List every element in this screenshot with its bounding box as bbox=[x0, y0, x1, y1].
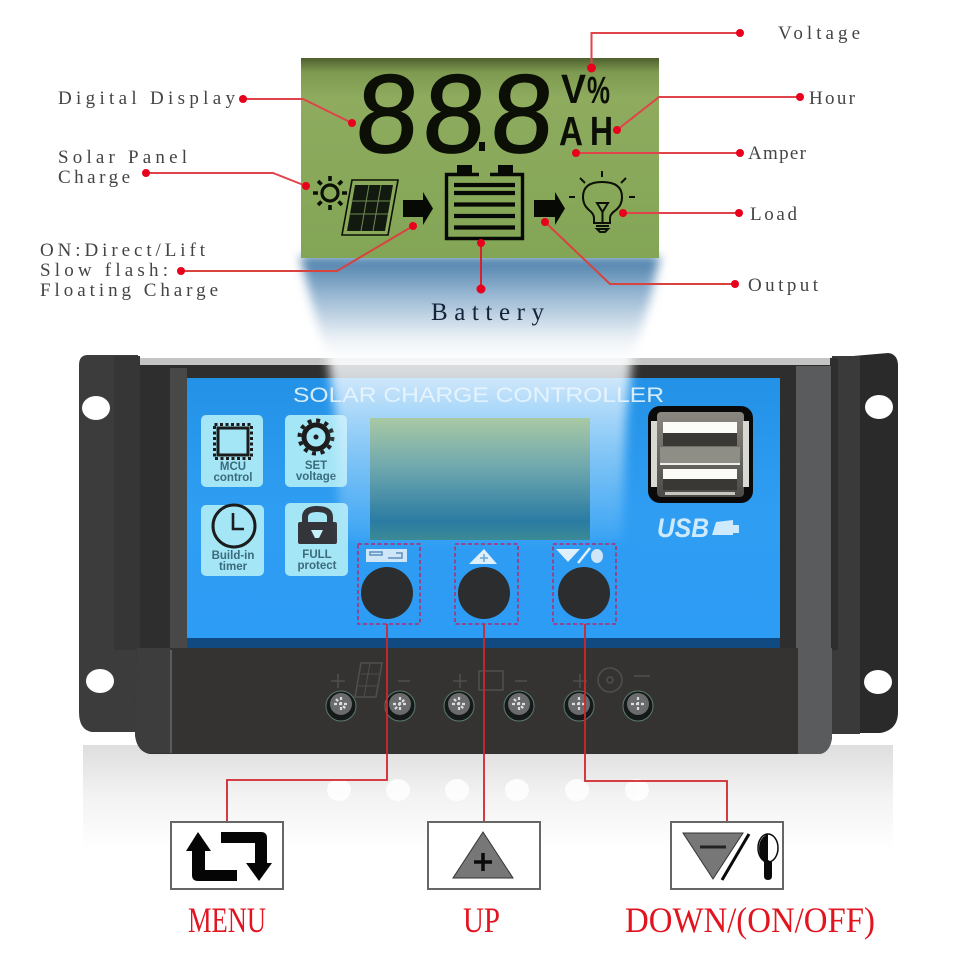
leader lines to buttons bbox=[227, 624, 727, 822]
unit labels: A bbox=[559, 108, 583, 154]
callout line: solar panel charge bbox=[142, 169, 310, 190]
mounting holes bbox=[82, 395, 893, 694]
feature tile: FULL protect bbox=[285, 503, 348, 576]
callout line: amper bbox=[572, 149, 744, 157]
USB label: USB bbox=[657, 513, 709, 543]
button label: DOWN/(ON/OFF): DOWN/(ON/OFF) bbox=[625, 900, 875, 940]
up key bbox=[428, 822, 540, 889]
label: Solar Panel Charge: Solar Panel bbox=[58, 147, 187, 168]
icon: light bulb bbox=[569, 171, 635, 232]
label: Solar Panel Charge bbox=[58, 147, 187, 188]
label: charge mode: Floating Charge bbox=[40, 280, 218, 301]
label: charge mode: ON:Direct/Lift bbox=[40, 240, 206, 261]
label: Solar Panel Charge: Charge bbox=[58, 167, 130, 188]
icon: sun bbox=[313, 176, 347, 210]
feature tile: MCU control: MCU bbox=[220, 461, 246, 473]
unit labels: H bbox=[590, 108, 613, 154]
LCD close-up panel bbox=[301, 51, 659, 258]
label: charge mode bbox=[40, 240, 218, 301]
button group: up bbox=[455, 544, 518, 624]
digits reading 88.8: 8 bbox=[419, 51, 490, 176]
charge controller device bbox=[79, 353, 898, 754]
right mounting bracket bbox=[830, 353, 898, 733]
feature tile: SET voltage: voltage bbox=[296, 471, 336, 483]
label: Digital Display: Digital Display bbox=[58, 88, 236, 109]
device body bbox=[118, 358, 838, 650]
button label: UP: UP bbox=[463, 900, 500, 940]
terminal block bbox=[135, 648, 832, 754]
label: Voltage: Voltage bbox=[778, 23, 860, 44]
left mounting bracket bbox=[79, 355, 138, 732]
unit labels bbox=[559, 66, 613, 154]
icon: arrow to load bbox=[534, 192, 565, 225]
terminal symbols bbox=[331, 663, 650, 697]
feature tile: SET voltage: SET bbox=[305, 460, 327, 472]
light beam projected from screen bbox=[300, 256, 660, 540]
button group: down bbox=[553, 544, 616, 624]
feature tile: Build-in timer: timer bbox=[219, 561, 248, 573]
feature tile: FULL protect: FULL bbox=[302, 549, 332, 561]
callout line: output bbox=[541, 218, 739, 288]
icon: arrow to battery bbox=[403, 192, 433, 225]
digits reading 88.8: 8 bbox=[352, 51, 423, 176]
USB double port bbox=[648, 406, 753, 503]
feature tile: SET voltage bbox=[285, 415, 347, 487]
icon: solar panel bbox=[342, 180, 398, 235]
feature tile: MCU control bbox=[201, 415, 263, 487]
menu key bbox=[171, 822, 283, 889]
floor reflection bbox=[83, 745, 893, 850]
down and on/off key bbox=[671, 822, 783, 889]
feature tile: FULL protect: protect bbox=[298, 560, 337, 572]
label: Battery: Battery bbox=[431, 299, 544, 326]
faceplate title: SOLAR CHARGE CONTROLLER bbox=[293, 384, 664, 407]
label: charge mode: Slow flash: bbox=[40, 260, 168, 281]
callout line: hour bbox=[613, 93, 804, 134]
label: Output: Output bbox=[748, 275, 819, 296]
unit labels: V bbox=[561, 66, 587, 112]
icon: battery bbox=[446, 165, 522, 238]
label: Load: Load bbox=[750, 204, 798, 225]
callout line: battery bbox=[476, 239, 486, 294]
unit labels: % bbox=[587, 70, 610, 112]
feature tile: Build-in timer: Build-in bbox=[212, 550, 254, 562]
label: Hour: Hour bbox=[809, 88, 856, 109]
callout line: voltage bbox=[587, 29, 744, 72]
callout lines and dots bbox=[142, 29, 804, 294]
digits reading 88.8: 8 bbox=[487, 51, 558, 176]
digits reading 88.8 bbox=[352, 51, 558, 176]
feature tile: MCU control: control bbox=[214, 472, 252, 484]
feature tile: Build-in timer bbox=[201, 505, 264, 576]
blue faceplate bbox=[187, 378, 780, 638]
callout line: load bbox=[619, 209, 743, 217]
callout line: direct / floating charge bbox=[177, 222, 417, 275]
callout line: digital display bbox=[239, 95, 356, 127]
label: Amper: Amper bbox=[748, 143, 807, 164]
button group: menu bbox=[358, 544, 420, 624]
button label: MENU: MENU bbox=[188, 900, 266, 940]
USB label bbox=[657, 513, 739, 543]
device screen bbox=[370, 418, 590, 540]
terminal screws bbox=[326, 691, 653, 721]
